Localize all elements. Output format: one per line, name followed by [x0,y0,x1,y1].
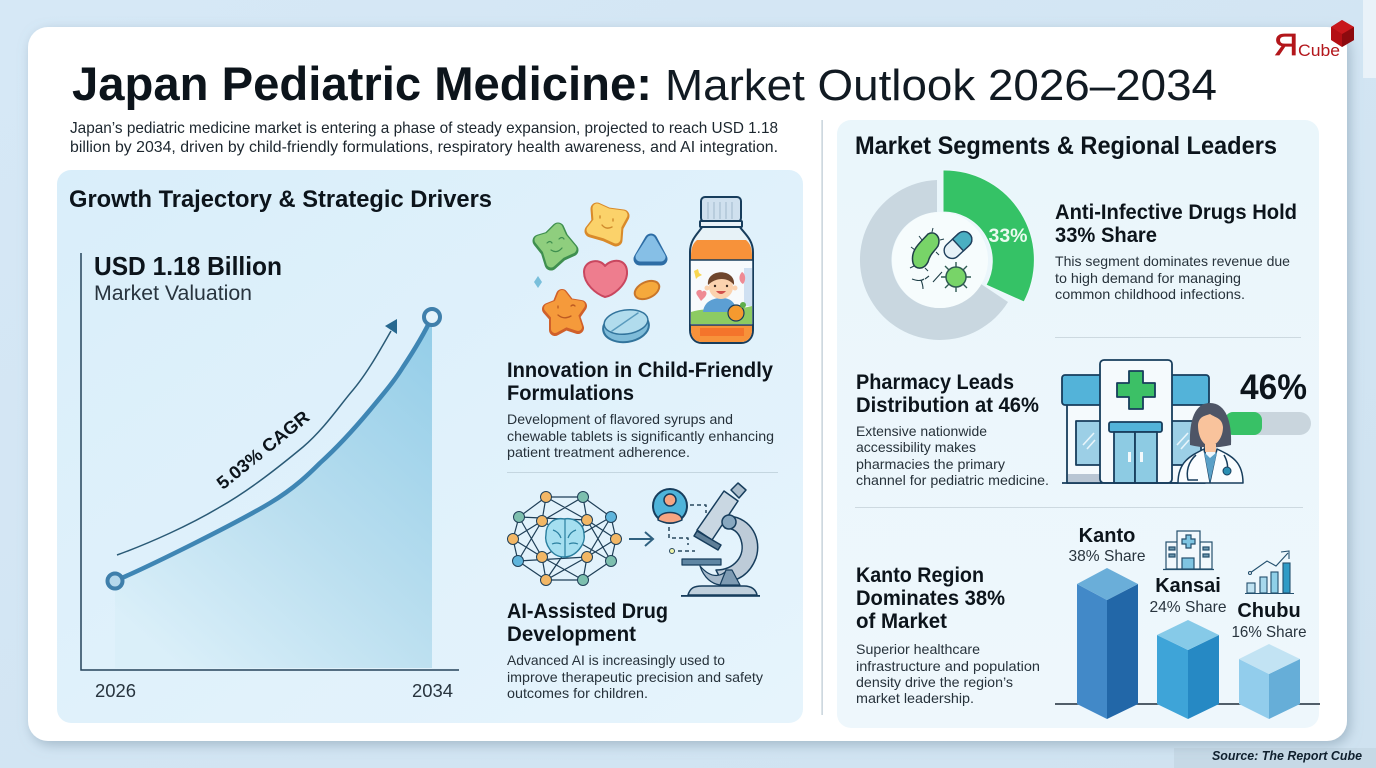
progress bar: pharmacy 46%: 46% [1240,368,1307,407]
logo: RCube [1274,20,1354,62]
icon: bacteria, capsule and virus [910,228,975,292]
bar: Kansai: Kansai [1155,575,1221,597]
bar chart: regional share [1055,525,1320,719]
text block: anti-infective drugs: This segment dominates revenue due [1055,253,1290,269]
text block: Kanto region: market leadership. [856,690,974,706]
icon: syrup bottle [690,197,753,343]
text block: pharmacy distribution: channel for pediatric medicine. [856,472,1049,488]
icon: neural network with brain [508,492,622,586]
text block: AI-assisted drug development: Development [507,622,636,646]
bar: Chubu [1232,600,1307,719]
line chart: market valuation [81,251,459,701]
icon: doctor [1178,403,1243,483]
icon: hospital [1163,531,1214,570]
line chart: market valuation: USD 1.18 Billion [94,251,282,281]
text block: Kanto region: infrastructure and population [856,658,1040,674]
icon: growth chart [1245,551,1294,594]
title: Market Outlook 2026–2034 [665,61,1217,110]
title: Japan Pediatric Medicine: [72,57,652,110]
source note: Source: The Report Cube [1212,749,1362,763]
text block: anti-infective drugs: 33% Share [1055,223,1157,247]
text block: Kanto region [856,563,1040,706]
text block: AI-assisted drug development: improve therapeutic precision and safety [507,669,763,685]
icon: researcher and microscope [653,483,760,597]
text block: child-friendly formulations: Innovation in Child-Friendly [507,358,773,382]
text block: child-friendly formulations: Development of flavored syrups and [507,411,733,427]
text block: pharmacy distribution: Distribution at 46% [856,393,1039,417]
bar: Kanto: 38% Share [1068,548,1146,565]
text block: child-friendly formulations: patient treatment adherence. [507,444,690,460]
bar: Kansai: 24% Share [1150,599,1227,616]
title [72,57,1217,110]
text block: AI-assisted drug development: AI-Assisted Drug [507,599,668,623]
text block: Kanto region: of Market [856,609,947,633]
text block: AI-assisted drug development: outcomes for children. [507,685,648,701]
intro text: Japan’s pediatric medicine market is entering a phase of steady expansion, projected to reach USD 1.18 [70,120,778,137]
text block: pharmacy distribution: Pharmacy Leads [856,370,1014,394]
line chart: market valuation: Market Valuation [94,282,252,305]
bar: Chubu: 16% Share [1232,624,1307,641]
text block: child-friendly formulations [507,358,774,460]
bar: Kansai [1150,575,1227,719]
text block: pharmacy distribution: pharmacies the primary [856,456,1005,472]
panel heading: growth trajectory: Growth Trajectory & Strategic Drivers [69,186,492,213]
icon: chewable candies and tablets [534,208,662,345]
line chart: market valuation: 5.03% CAGR [213,407,313,493]
intro text [70,120,778,156]
intro text: billion by 2034, driven by child-friendly formulations, respiratory health awareness, and AI integration. [70,139,778,156]
icon: pharmacy storefront [1062,360,1209,483]
panel: market segments and regional leaders [837,120,1320,728]
text block: child-friendly formulations: Formulations [507,381,634,405]
text block: pharmacy distribution: Extensive nationwide [856,423,987,439]
bar: Kanto: Kanto [1079,525,1135,547]
donut chart: anti-infective share: 33% [988,225,1028,247]
text block: pharmacy distribution [856,370,1049,488]
logo: RCube: Я [1274,27,1298,62]
logo: RCube: Cube [1298,41,1340,60]
progress bar: pharmacy 46% [1225,368,1311,435]
text block: Kanto region: Superior healthcare [856,641,980,657]
text block: Kanto region: density drive the region’s [856,674,1013,690]
text block: child-friendly formulations: chewable tablets is significantly enhancing [507,428,774,444]
arrow: AI to microscope [629,532,653,546]
bar: Kanto [1068,525,1146,719]
text block: anti-infective drugs: Anti-Infective Drugs Hold [1055,200,1297,224]
line chart: market valuation: 2034 [412,681,453,701]
text block: Kanto region: Kanto Region [856,563,984,587]
line chart: market valuation: 2026 [95,681,136,701]
text block: pharmacy distribution: accessibility makes [856,439,976,455]
text block: anti-infective drugs: common childhood infections. [1055,286,1245,302]
panel: growth trajectory and strategic drivers [57,170,803,723]
text block: AI-assisted drug development: Advanced AI is increasingly used to [507,652,725,668]
bar: Chubu: Chubu [1237,600,1301,622]
text block: anti-infective drugs [1055,200,1297,302]
panel heading: market segments: Market Segments & Regional Leaders [855,132,1277,160]
donut chart: anti-infective share [860,170,1034,340]
text block: AI-assisted drug development [507,599,763,701]
text block: Kanto region: Dominates 38% [856,586,1005,610]
text block: anti-infective drugs: to high demand for managing [1055,270,1241,286]
